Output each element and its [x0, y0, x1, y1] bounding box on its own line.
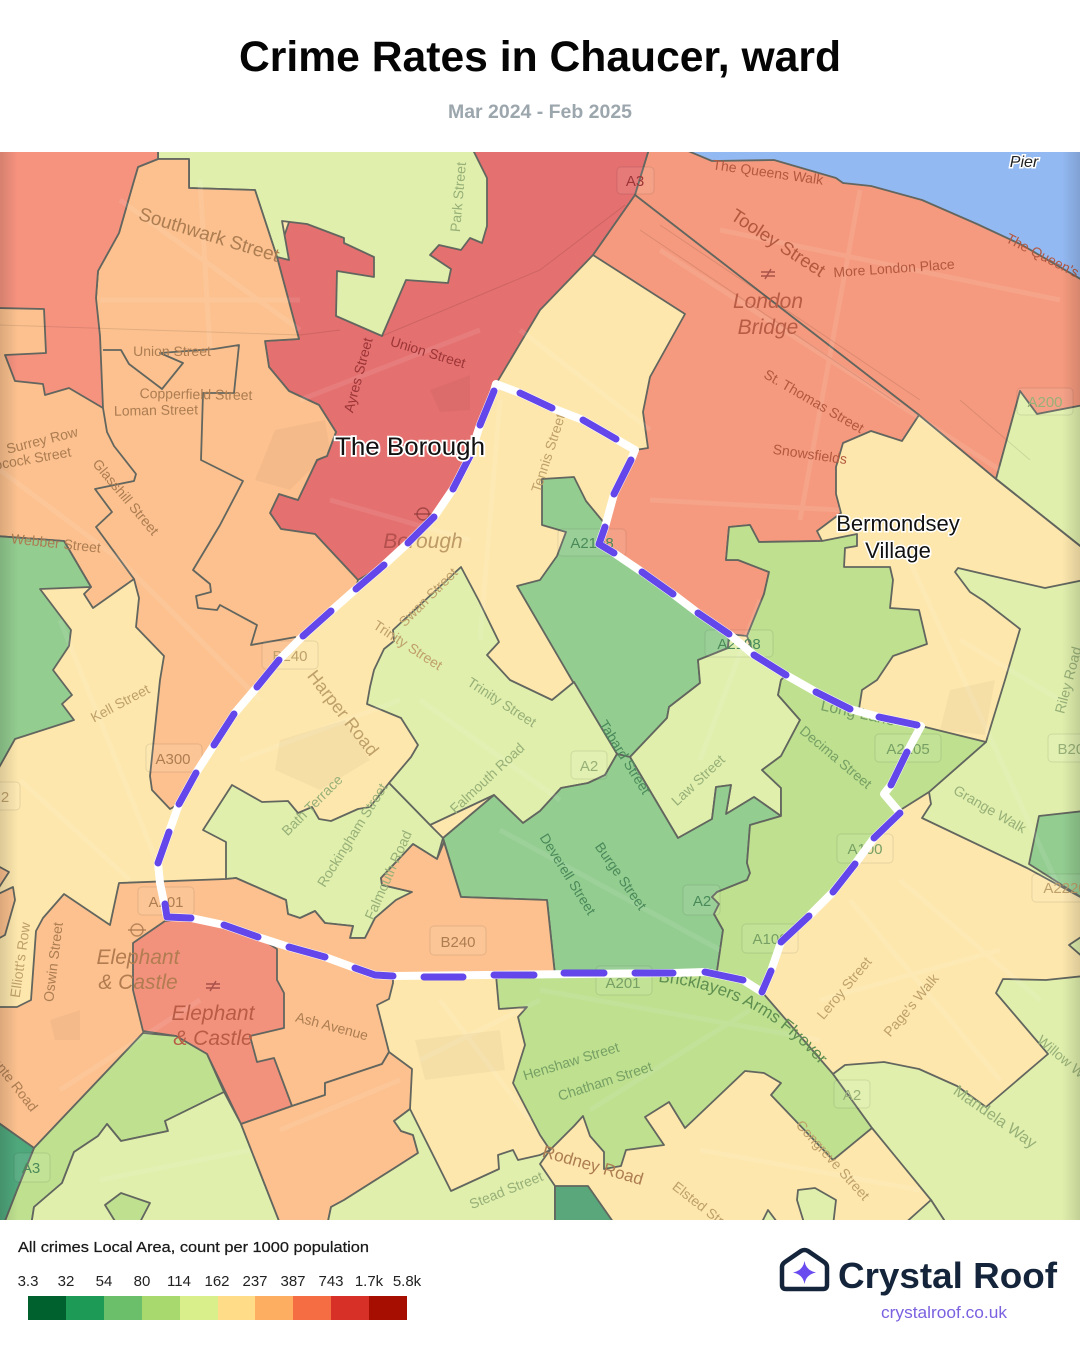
label: Elephant and Castle (red): & Castle: [173, 1027, 253, 1050]
region: Mandela Way light green: [833, 976, 1080, 1226]
rail lines: [0, 205, 1030, 460]
region: south-west mid green: [3, 1033, 224, 1226]
label: Decima Street: Decima Street: [797, 722, 875, 792]
legend scale values: 162: [204, 1273, 230, 1290]
region: Bermondsey mid green: [726, 525, 927, 709]
shield: A3 north: A3: [626, 173, 644, 190]
label: Henshaw Street: Henshaw Street: [521, 1039, 621, 1083]
legend scale values: 237: [242, 1273, 268, 1290]
shield: A2205: A2205: [886, 741, 930, 758]
diagonal rail viaduct boundary: [996, 479, 1080, 549]
legend scale values: 54: [96, 1273, 112, 1290]
legend scale values: 1.7k: [355, 1273, 384, 1290]
shield: B240 west: B240: [272, 648, 308, 665]
icon: house outline with star: [782, 1250, 827, 1289]
region: small mid green patch: [104, 1192, 151, 1220]
shield: A3 south-west: [14, 1153, 50, 1182]
label: Trinity Street west: Trinity Street: [371, 617, 446, 673]
label: Tabard Street: Tabard Street: [596, 717, 654, 797]
legend scale values: 80: [134, 1273, 150, 1290]
shield: B240 east: B240: [440, 934, 476, 951]
label: Ayres Street: Ayres Street: [340, 336, 376, 414]
logo: Crystal Roof: [782, 1250, 1058, 1322]
shield: A200: A200: [1027, 394, 1063, 411]
shield: A201: [138, 887, 194, 915]
shield: A300: A300: [155, 751, 191, 768]
label: Bricklayers Arms Flyover: Bricklayers Arms Flyover: [660, 976, 827, 1062]
label: Elliott's Row: Elliott's Row: [7, 920, 33, 999]
region: Elephant west orange: [0, 842, 555, 1148]
map base: yellow band areas: [0, 152, 1080, 1220]
region: Decima Street mid green: [705, 675, 986, 992]
label: Bath Terrace: Bath Terrace: [278, 771, 346, 839]
legend scale values: 5.8k: [393, 1273, 422, 1290]
label: Kell Street: Kell Street: [88, 681, 152, 725]
label: Bermondsey Village: Bermondsey: [836, 511, 960, 536]
label: Snowsfields: Snowsfields: [772, 441, 848, 467]
shield: A2198: [705, 630, 773, 657]
label: St. Thomas Street: St. Thomas Street: [761, 366, 867, 436]
label: London Bridge: London: [733, 290, 803, 313]
shield: A2 south-centre: [683, 885, 720, 915]
label: Bermondsey Village: Village: [865, 538, 931, 563]
legend scale values: 3.3: [18, 1273, 38, 1290]
region: Grange Walk light green: [922, 568, 1080, 899]
legend colour swatches: [28, 1296, 407, 1320]
label: Ash Avenue: Ash Avenue: [294, 1009, 370, 1043]
label: Glasshill Street: Glasshill Street: [90, 456, 162, 538]
region: Stead Street light green: [327, 1109, 555, 1226]
label: Union Street west: Union Street: [133, 343, 211, 359]
region: Rodney dark green: [554, 1185, 613, 1220]
legend scale values: 743: [318, 1273, 344, 1290]
shield: A2220: [1032, 874, 1080, 902]
label: Burge Street: Burge Street: [592, 839, 650, 913]
label: Chatham Street: Chatham Street: [556, 1058, 654, 1104]
region: The Borough high crime: [265, 146, 650, 580]
shield: B240 west: [262, 641, 318, 669]
website link text: crystalroof.co.uk: [881, 1304, 1008, 1322]
label: The Queens Walk west: The Queens Walk: [712, 156, 825, 188]
region: west green: [0, 536, 91, 773]
label: More London Place: More London Place: [833, 256, 955, 280]
shield: A100 south: A100: [752, 931, 788, 948]
region: London Bridge salmon: [593, 195, 919, 636]
legend scale values: 387: [280, 1273, 306, 1290]
legend scale values: 114: [167, 1273, 191, 1290]
region: south-west dark green: [0, 1121, 34, 1226]
shield: B240 east: [430, 926, 486, 955]
shield: A2 centre: A2: [580, 758, 598, 775]
shield: A2 south-east: A2: [843, 1087, 861, 1104]
region: Trinity Street light green: [367, 567, 617, 825]
region: small light green south: [908, 1199, 945, 1220]
label: Copperfield Street: Copperfield Street: [139, 385, 253, 403]
label: Union Street east: Union Street: [388, 333, 468, 371]
label: Mandela Way: Mandela Way: [950, 1083, 1039, 1152]
region: top-left salmon: [0, 148, 158, 408]
shield: A2 centre: [571, 751, 607, 779]
label: Falmouth Road south: Falmouth Road: [361, 828, 415, 922]
shield: A2205: [875, 734, 941, 762]
label: Falmouth Road north: Falmouth Road: [447, 740, 527, 816]
legend scale values: 32: [58, 1273, 74, 1290]
label: Southwark Street: Southwark Street: [136, 204, 282, 267]
title: Crime Rates in Chaucer, ward: [239, 33, 841, 81]
label: Pier: Pier: [1010, 154, 1039, 171]
label: Park Street: Park Street: [447, 161, 469, 233]
street grid overlay: [0, 180, 1060, 1190]
shield: A100 north: [837, 834, 893, 863]
label: Rodney Road: Rodney Road: [540, 1142, 645, 1189]
wordmark: Crystal Roof: [838, 1255, 1058, 1296]
label: Deverell Street: Deverell Street: [537, 830, 599, 918]
region: Tooley Street salmon: [635, 146, 1080, 479]
subtitle: date range: Mar 2024 - Feb 2025: [448, 102, 632, 123]
shield: A100 south: [742, 924, 798, 953]
road shields: [0, 167, 1080, 1182]
label: Elephant and Castle (orange): Elephant: [97, 946, 179, 969]
region: Deverell Street green: [443, 754, 781, 975]
label: Stead Street: Stead Street: [467, 1168, 545, 1212]
label: Congreve Street: Congreve Street: [793, 1117, 873, 1203]
legend: [18, 1239, 422, 1320]
shield: B205: [1048, 734, 1080, 762]
region: Southwark Street orange: [0, 159, 358, 809]
shield: A2 south-east: [834, 1080, 870, 1108]
label: Elsted Street: Elsted Street: [669, 1178, 743, 1240]
region: A200 light green: [996, 391, 1080, 549]
shield: A2 south-centre: A2: [693, 893, 711, 910]
label: The Borough: The Borough: [335, 433, 485, 461]
label: Long Lane: Long Lane: [819, 697, 897, 730]
label: Law Street: Law Street: [668, 751, 728, 809]
shield: A2198: A2198: [717, 636, 761, 653]
label: Trinity Street east: Trinity Street: [465, 674, 540, 730]
legend title: All crimes Local Area, count per 1000 population: [18, 1239, 369, 1256]
rail and tube symbols: [128, 269, 775, 991]
region: A2108 green: [517, 477, 729, 757]
label: Page's Walk: Page's Walk: [880, 970, 942, 1040]
inner orange boundaries: [95, 345, 296, 645]
label: Webber Street: Webber Street: [10, 530, 102, 556]
shield: A100 north: A100: [847, 841, 883, 858]
label: Loman Street: Loman Street: [114, 401, 198, 419]
shield: A201 south: [596, 966, 652, 995]
ward boundary: white casing: [158, 384, 921, 992]
region: Law Street light green: [630, 634, 800, 838]
shield: A2 far west: [0, 782, 20, 810]
label: Tennis Street: Tennis Street: [528, 412, 568, 494]
label: Leroy Street: Leroy Street: [813, 954, 875, 1022]
region: small red block north: [358, 148, 418, 183]
region: south-west light green: [31, 1092, 281, 1226]
label path: Bricklayers Arms Flyover baseline: [658, 982, 826, 1072]
label: Elephant and Castle (orange): & Castle: [98, 971, 178, 994]
map edge vignette left: [0, 152, 18, 1220]
shield: A300: [146, 744, 202, 772]
label: Harper Road: Harper Road: [303, 666, 383, 760]
region: south orange: [241, 1052, 418, 1226]
label: Grange Walk: Grange Walk: [951, 782, 1030, 837]
region: small orange west edge: [0, 866, 10, 888]
region: Park Street light green: [158, 148, 487, 336]
region: Henshaw Street mid green: [496, 972, 872, 1169]
label: Tooley Street: Tooley Street: [727, 204, 829, 281]
region: Elephant and Castle salmon: [133, 918, 292, 1124]
map edge vignette right: [1062, 152, 1080, 1220]
label: Swan Street: Swan Street: [395, 564, 461, 630]
park patches: [50, 375, 995, 1080]
label: Oswin Street: Oswin Street: [40, 921, 66, 1003]
shield: A3 north: [617, 167, 654, 194]
shield: A201 south: A201: [605, 975, 641, 992]
region: east green block: [1029, 811, 1080, 899]
shield: A3 south-west: A3: [22, 1160, 40, 1177]
label: Surrey Row: Surrey Row: [5, 423, 80, 457]
shield: A200: [1017, 388, 1073, 415]
region: Bath Terrace light green: [203, 783, 443, 938]
place labels, italic: [97, 290, 803, 1050]
ward boundary: purple dashes: [158, 391, 917, 992]
label: London Bridge: Bridge: [738, 316, 798, 339]
shield: A2 far west: 2: [1, 789, 9, 806]
shield: A2108: A2108: [570, 535, 614, 552]
water: River Thames: [693, 152, 1080, 278]
shield: A2108: [558, 529, 626, 556]
label: Rockingham Street: Rockingham Street: [314, 780, 390, 890]
shield: A201: A201: [148, 894, 184, 911]
label: Borough: Borough: [383, 530, 463, 553]
label: Elephant and Castle (red): Elephant: [172, 1002, 254, 1025]
legend scale values: [18, 1273, 422, 1290]
